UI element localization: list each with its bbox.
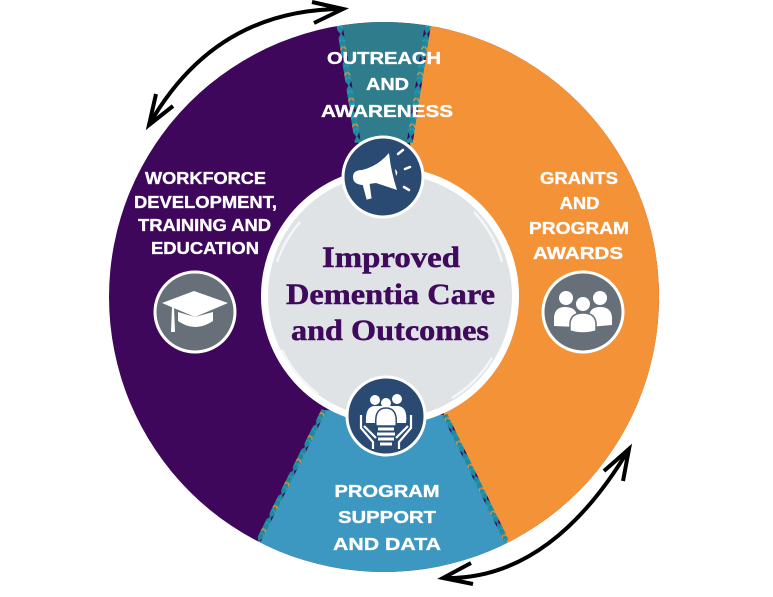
label: outreach and awareness: AND xyxy=(366,74,409,94)
arrow: top double-headed xyxy=(149,2,343,125)
label: grants and program awards xyxy=(529,168,629,263)
label: program support and data xyxy=(333,481,441,554)
label: outreach and awareness xyxy=(321,48,453,121)
label: workforce development xyxy=(134,168,277,258)
centre circle xyxy=(261,167,519,425)
label: grants and program awards: GRANTS xyxy=(540,168,618,188)
arrow: bottom double-headed xyxy=(443,449,629,584)
pattern strip: program left xyxy=(256,409,326,542)
label: grants and program awards: AND xyxy=(560,193,600,213)
segment: program support (blue) xyxy=(258,410,508,572)
pattern strip: outreach right xyxy=(407,25,431,143)
label: program support and data: PROGRAM xyxy=(334,481,440,501)
label: program support and data: AND DATA xyxy=(333,534,441,554)
label: workforce development: TRAINING AND xyxy=(138,215,271,235)
label: workforce development: EDUCATION xyxy=(151,238,259,258)
segment: workforce (purple) xyxy=(100,15,670,580)
label: program support and data: SUPPORT xyxy=(338,507,436,527)
icon: megaphone xyxy=(343,137,423,217)
heading: centre title xyxy=(286,241,495,347)
pattern strip: program right xyxy=(443,414,509,542)
segment: grants (orange) xyxy=(410,25,659,543)
icon: group of people xyxy=(543,272,623,352)
label: workforce development: WORKFORCE xyxy=(145,168,266,188)
icon: graduation cap xyxy=(155,272,235,352)
heading: centre title: Improved xyxy=(322,241,460,274)
segment: outreach (teal) xyxy=(342,22,425,143)
label: grants and program awards: PROGRAM xyxy=(529,218,629,238)
icon: people in hands xyxy=(347,377,425,455)
label: grants and program awards: AWARDS xyxy=(533,243,623,263)
ring diagram xyxy=(109,22,659,572)
label: workforce development: DEVELOPMENT, xyxy=(134,192,277,212)
heading: centre title: and Outcomes xyxy=(291,314,489,347)
heading: centre title: Dementia Care xyxy=(286,278,495,311)
label: outreach and awareness: AWARENESS xyxy=(321,101,453,121)
pattern strip: outreach left xyxy=(336,25,360,143)
label: outreach and awareness: OUTREACH xyxy=(327,48,441,68)
